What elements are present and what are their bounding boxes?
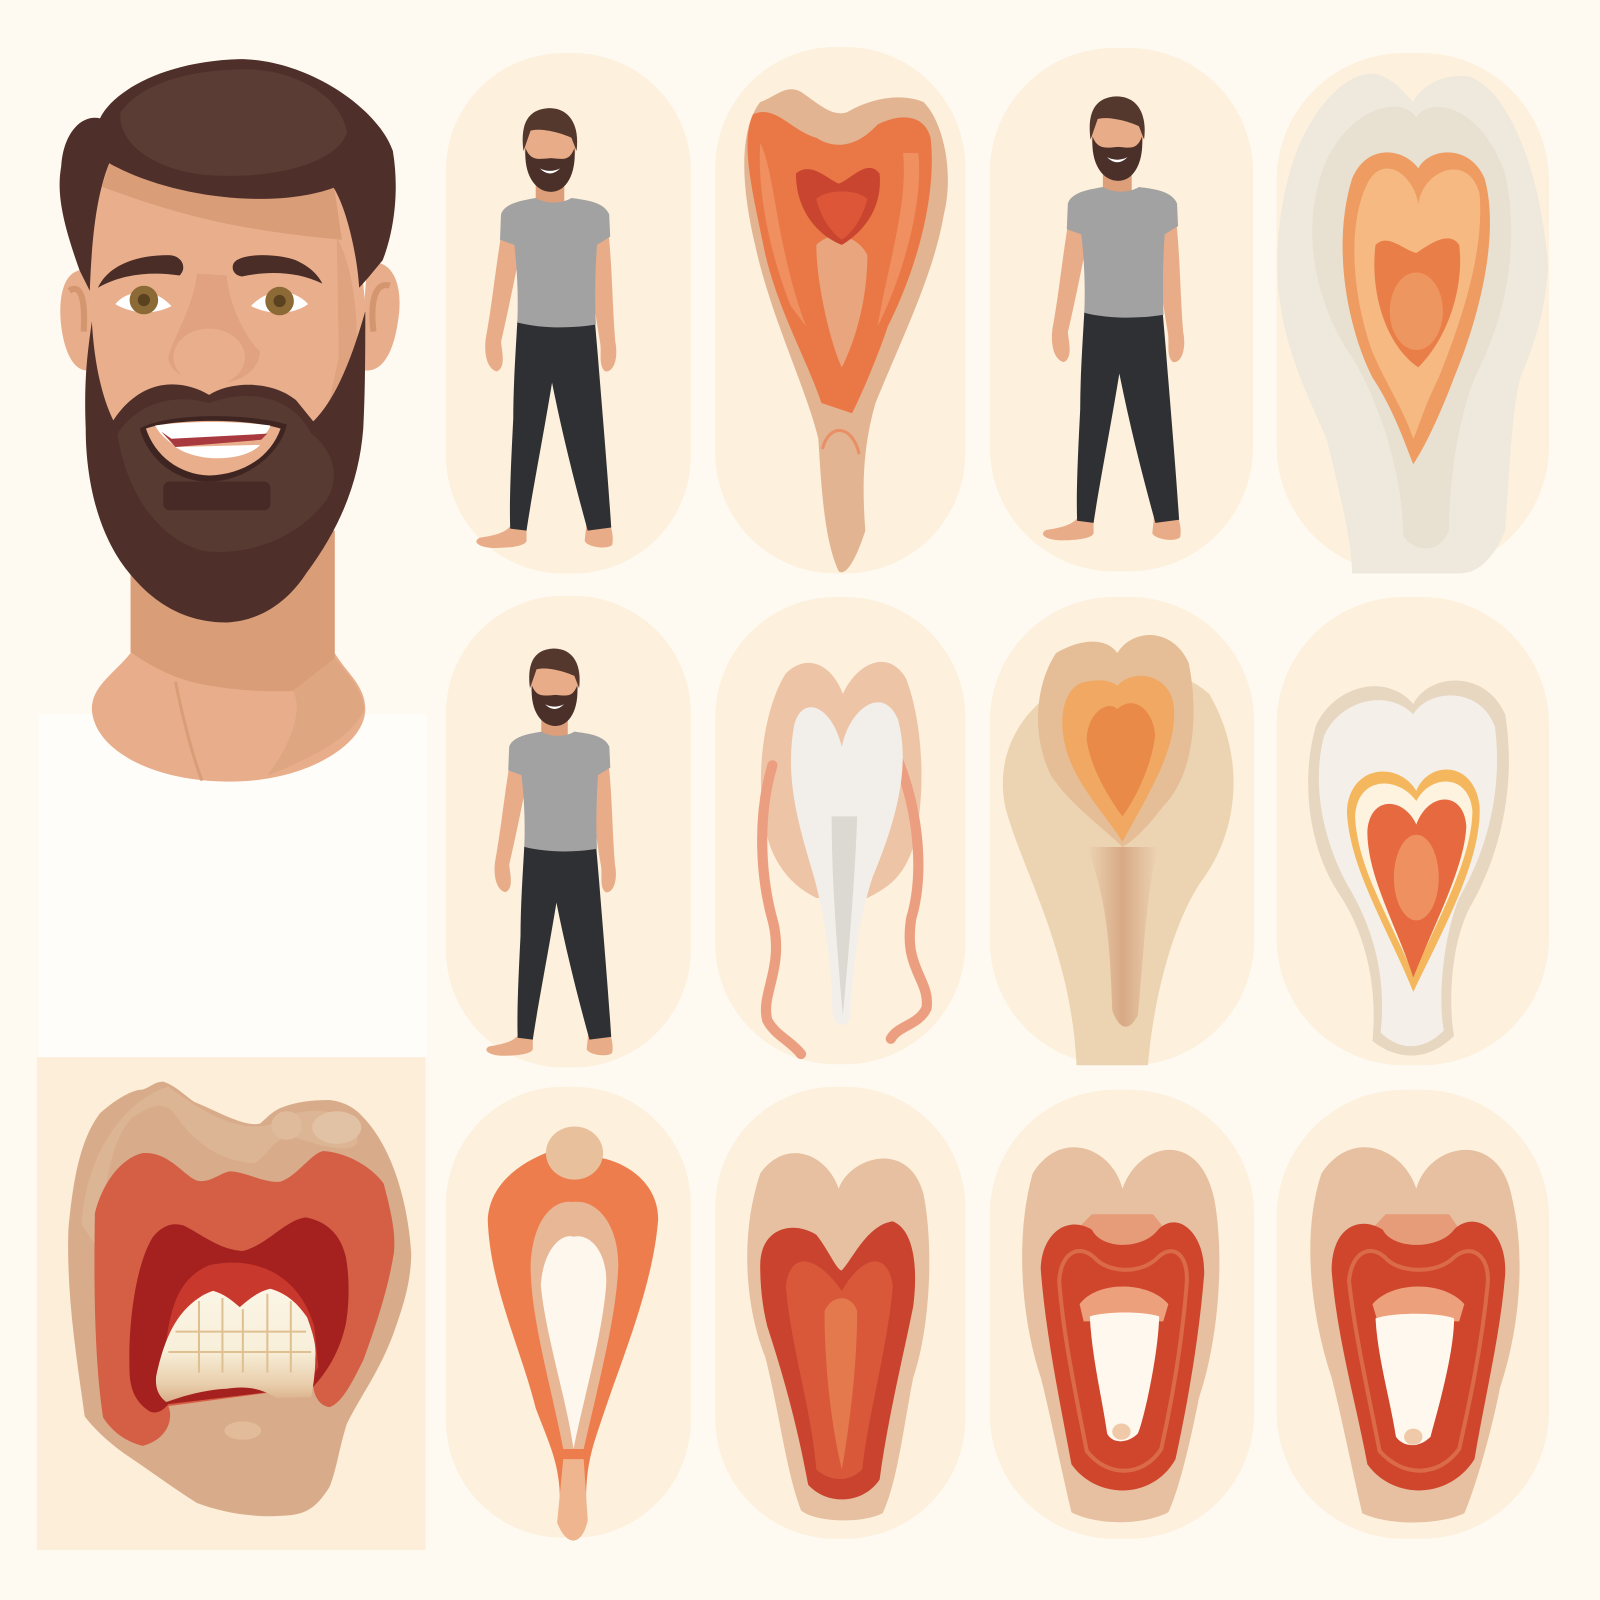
pale arch: [531, 1202, 618, 1449]
inner rings: [1059, 1251, 1187, 1471]
white inner body: [1319, 695, 1497, 1046]
tissue outer: [744, 89, 948, 572]
inner rings: [1349, 1251, 1488, 1471]
upper lip light: [82, 1087, 359, 1255]
left eyebrow: [98, 255, 183, 288]
red ring: [1332, 1222, 1505, 1490]
panel: bearded head portrait: [60, 59, 400, 782]
throat lighter: [163, 1263, 318, 1386]
inner orange: [1354, 169, 1480, 439]
panel: row 2 column 1 standing man: [446, 596, 691, 1067]
core center: [1394, 835, 1439, 920]
red: [760, 1221, 915, 1499]
core: [1087, 703, 1155, 816]
pale top ring: [1080, 1286, 1168, 1321]
white opening: [1090, 1312, 1159, 1441]
core: [1374, 238, 1460, 367]
root tip: [557, 1459, 588, 1541]
left tendril: [762, 765, 801, 1054]
pale top ring: [1372, 1286, 1464, 1321]
figure: [1043, 96, 1184, 540]
tongue center: [824, 1298, 857, 1469]
white heart: [791, 702, 903, 1025]
dot: [1112, 1423, 1131, 1440]
inner peach: [1051, 1214, 1194, 1306]
panel: row 3 column 3 red ring tissue: [990, 1090, 1254, 1539]
yellow ring: [1347, 769, 1480, 992]
right tendril: [891, 760, 927, 1039]
outer lips: [68, 1082, 411, 1516]
mouth: [140, 416, 287, 482]
middle layer: [1312, 107, 1511, 548]
inner dark throat: [129, 1217, 349, 1412]
left eye: [115, 286, 171, 314]
cap: [546, 1127, 603, 1180]
panel: row 3 column 4 red ring tissue: [1277, 1090, 1549, 1539]
outer body: [1003, 667, 1234, 1065]
panel: open mouth close-up: [37, 1057, 426, 1550]
teeth: [156, 1289, 316, 1402]
panel: row 2 column 2 white heart tissue: [715, 597, 965, 1064]
under-lip shadow: [163, 482, 270, 510]
upper lip bumps: [271, 1111, 361, 1144]
outer tan: [747, 1153, 929, 1520]
dot: [1404, 1429, 1422, 1445]
right face shadow: [327, 237, 357, 413]
inner white arch: [541, 1236, 606, 1449]
top tan lobe: [1038, 635, 1194, 847]
outer red band: [94, 1151, 394, 1446]
nose: [168, 273, 260, 386]
panel: row 3 column 1 root tissue: [446, 1087, 691, 1541]
white ring: [1355, 781, 1472, 974]
outer tan: [761, 662, 921, 898]
central pale streak: [816, 236, 867, 367]
grey center: [832, 816, 857, 1015]
tissue: [488, 1138, 658, 1540]
hair highlight: [120, 69, 347, 176]
forehead shadow: [102, 163, 342, 240]
orange layer: [1343, 152, 1490, 464]
hole: [796, 168, 880, 245]
panel: row 2 column 4 white-rim heart: [1277, 597, 1549, 1065]
lower root arc: [822, 430, 859, 454]
neck and shoulders: [92, 531, 365, 782]
right eye: [251, 287, 308, 315]
core center: [1390, 272, 1443, 350]
darker ring: [786, 1261, 893, 1479]
outer layer: [1277, 73, 1548, 573]
beard highlight: [117, 396, 334, 552]
inner peach: [1347, 1214, 1485, 1306]
outer tan: [1022, 1147, 1219, 1522]
red ring: [1041, 1222, 1204, 1490]
outer tan: [1310, 1147, 1520, 1522]
figure: [476, 108, 616, 548]
inner column: [1087, 847, 1158, 1027]
panel: row 1 column 2 inflamed tissue: [715, 47, 965, 573]
ears: [60, 262, 400, 371]
right eyebrow: [233, 255, 322, 284]
orange core: [1367, 799, 1466, 978]
panel: row 2 column 3 tan heart section: [990, 597, 1254, 1065]
face: [87, 163, 365, 449]
lower lip lump: [224, 1421, 261, 1440]
hair: [60, 59, 396, 291]
light blank area: [39, 714, 427, 1057]
panel: row 3 column 2 red tissue: [715, 1087, 965, 1539]
tissue orange: [747, 112, 932, 413]
middle pale ring: [1062, 676, 1174, 842]
panel: row 1 column 3 standing man: [990, 48, 1253, 571]
panel: row 1 column 4 layered cross-section: [1277, 53, 1549, 573]
beard: [85, 311, 365, 622]
white opening: [1376, 1314, 1454, 1445]
outer: [1308, 680, 1509, 1056]
figure: [486, 649, 616, 1056]
lighter side streaks: [760, 143, 919, 327]
panel: row 1 column 1 standing man: [446, 53, 691, 573]
